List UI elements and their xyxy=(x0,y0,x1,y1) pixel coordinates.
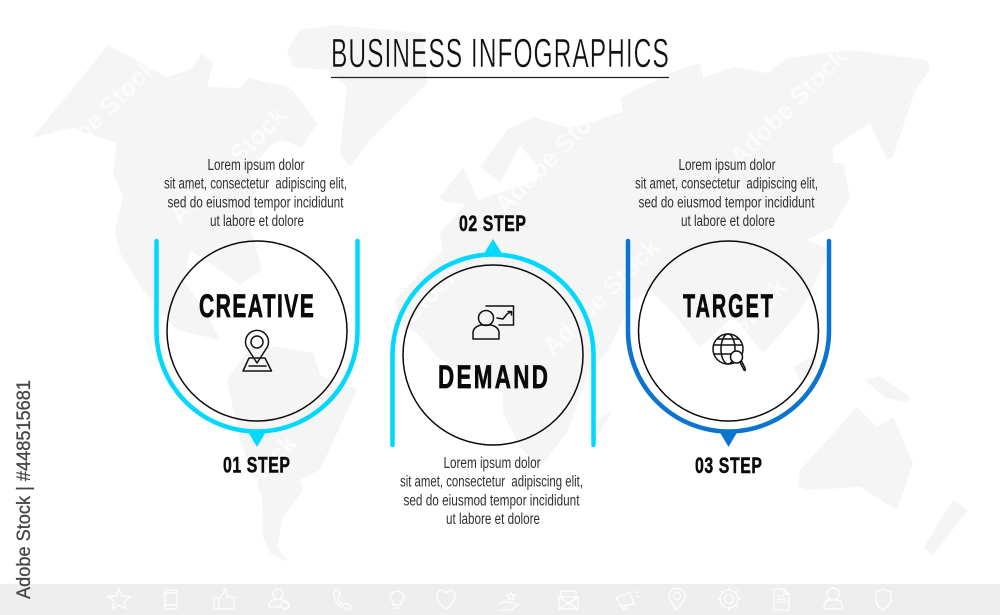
icon: globe with magnifier xyxy=(713,334,745,370)
watermarks: Adobe Stock xyxy=(174,429,302,557)
text block: step 3 description: sed do eiusmod tempor incididunt xyxy=(638,194,815,212)
text block: step 1 description: sit amet, consectetur adipiscing elit, xyxy=(164,176,347,192)
panel: step 1 creative xyxy=(156,157,358,478)
circle xyxy=(403,265,583,445)
watermarks: Adobe Stock xyxy=(827,116,955,244)
text block: step 3 description: Lorem ipsum dolor xyxy=(678,157,776,174)
u-shaped outline with pointer xyxy=(628,241,829,447)
watermarks: Adobe Stock xyxy=(214,221,342,349)
circle xyxy=(167,241,347,421)
u-shaped outline with pointer xyxy=(156,241,358,447)
watermarks: Adobe Stock xyxy=(379,396,507,524)
text block: step 2 description xyxy=(400,455,583,528)
icon: map pin xyxy=(243,330,272,371)
arch outline with pointer xyxy=(392,239,594,445)
watermarks: Adobe Stock xyxy=(664,273,792,401)
step label: 03 step: 03 STEP xyxy=(695,455,762,479)
heading: creative: CREATIVE xyxy=(199,287,314,324)
circle xyxy=(638,241,818,421)
text block: step 3 description: sit amet, consectetur adipiscing elit, xyxy=(635,176,818,192)
text block: step 1 description: ut labore et dolore xyxy=(210,213,304,230)
text block: step 2 description: sed do eiusmod tempor incididunt xyxy=(404,492,580,510)
watermarks: Adobe Stock xyxy=(711,406,839,534)
icon: presenter with chart xyxy=(473,306,514,339)
watermarks: Adobe Stock xyxy=(724,43,852,171)
watermarks: Adobe Stock xyxy=(164,101,292,229)
watermarks: Adobe Stock xyxy=(837,446,965,574)
icon row xyxy=(108,588,891,610)
text block: step 1 description: sed do eiusmod tempor incididunt xyxy=(168,194,344,212)
text block: step 3 description xyxy=(635,157,818,230)
heading: demand: DEMAND xyxy=(438,359,548,395)
text block: step 1 description: Lorem ipsum dolor xyxy=(208,157,304,174)
heading: target: TARGET xyxy=(683,288,773,324)
text block: step 2 description: Lorem ipsum dolor xyxy=(444,455,540,472)
text block: step 2 description: ut labore et dolore xyxy=(446,511,540,528)
title: BUSINESS INFOGRAPHICS xyxy=(331,31,669,77)
watermarks: Adobe Stock xyxy=(867,246,995,374)
watermarks: Adobe Stock xyxy=(337,259,465,387)
watermarks: Adobe Stock xyxy=(489,91,617,219)
watermarks: Adobe Stock xyxy=(34,53,162,181)
text block: step 3 description: ut labore et dolore xyxy=(681,213,775,230)
watermarks: Adobe Stock xyxy=(537,233,665,361)
watermarks: Adobe Stock xyxy=(4,251,132,379)
text block: step 1 description xyxy=(164,157,347,230)
step label: 01 step: 01 STEP xyxy=(223,454,290,478)
watermarks: Adobe Stock xyxy=(47,386,175,514)
text block: step 2 description: sit amet, consectetur adipiscing elit, xyxy=(400,474,583,490)
vertical stock credit: Adobe Stock | #448515681 xyxy=(14,380,35,599)
step label: 02 step: 02 STEP xyxy=(459,213,526,237)
watermarks: Adobe Stock xyxy=(369,66,497,194)
panel: step 2 demand xyxy=(392,213,594,528)
watermarks: Adobe Stock xyxy=(504,439,632,567)
panel: step 3 target xyxy=(628,157,829,479)
bottom icon bar xyxy=(0,584,1000,615)
